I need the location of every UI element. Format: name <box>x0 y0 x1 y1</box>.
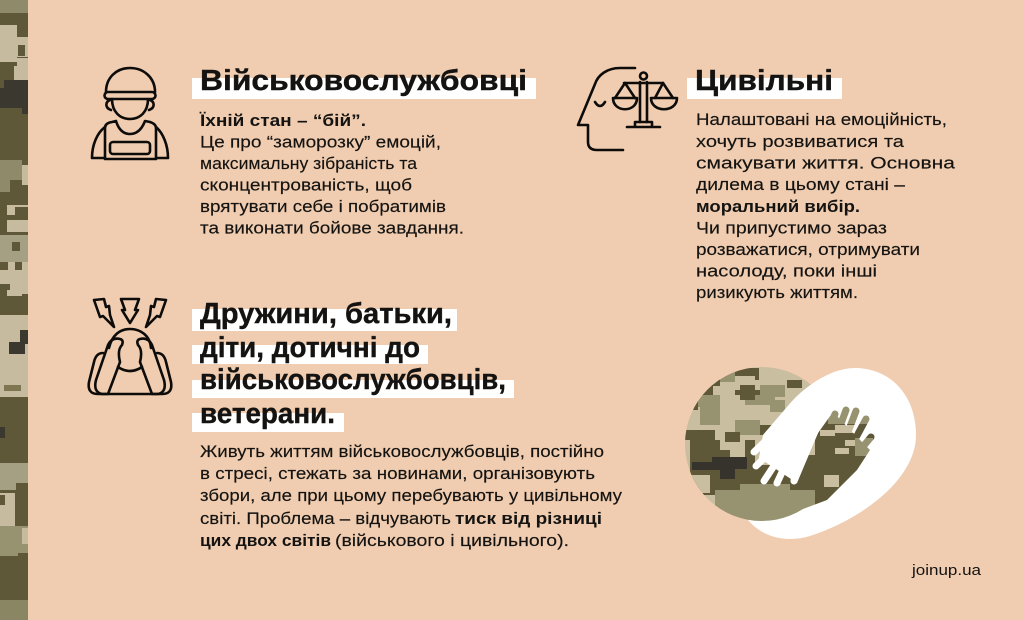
heading: family and veterans: Дружини, батьки, <box>200 298 452 330</box>
heading: military: Військовослужбовці <box>200 65 527 97</box>
text block: civilians: моральний вибір. <box>696 197 860 216</box>
text block: civilians: насолоду, поки інші <box>696 262 877 280</box>
text block: military: сконцентрованість, щоб <box>200 176 412 194</box>
text block: family and veterans: Живуть життям військовослужбовців, постійно <box>200 442 604 461</box>
text block: family and veterans: (військового і цивільного). <box>335 531 569 550</box>
text block: civilians: ризикують життям. <box>696 283 858 302</box>
text block: civilians: Чи припустимо зараз <box>696 218 887 238</box>
heading: family and veterans: ветерани. <box>200 398 335 430</box>
heading bar: military <box>192 65 536 99</box>
text block: family and veterans: цих двох світів <box>200 531 331 550</box>
text block: military: врятувати себе і побратимів <box>200 197 446 216</box>
icon: head with scales <box>578 68 677 150</box>
text block: civilians: розважатися, отримувати <box>696 240 920 259</box>
icon: soldier <box>92 68 168 159</box>
text block: military: Їхній стан – “бій”. <box>199 111 366 130</box>
icon: stressed person <box>89 299 171 394</box>
heading: family and veterans <box>192 298 514 432</box>
text block: family and veterans: збори, але при цьому перебувають у цивільному <box>200 486 623 505</box>
text block: family and veterans: світі. Проблема – відчувають <box>200 509 451 528</box>
text block: military: та виконати бойове завдання. <box>200 218 464 238</box>
illustration: hands in camouflage and white <box>680 360 920 539</box>
heading: family and veterans: військовослужбовців, <box>200 364 506 396</box>
heading: civilians: Цивільні <box>695 65 833 97</box>
text block: military <box>199 111 464 238</box>
text block: civilians: дилема в цьому стані – <box>696 175 906 194</box>
text block: military: максимальну зібраність та <box>200 154 418 173</box>
text block: military: Це про “заморозку” емоцій, <box>200 132 441 152</box>
text block: civilians: Налаштовані на емоційність, <box>696 110 947 129</box>
heading: family and veterans: діти, дотичні до <box>200 332 420 364</box>
heading bar: civilians <box>687 65 842 99</box>
text block: family and veterans <box>200 442 623 550</box>
text block: civilians <box>696 110 956 302</box>
website label: joinup.ua <box>911 562 982 579</box>
camouflage strip <box>0 0 28 620</box>
text block: family and veterans: тиск від різниці <box>455 509 602 528</box>
text block: civilians: смакувати життя. Основна <box>696 154 956 172</box>
text block: family and veterans: в стресі, стежать за новинами, організовують <box>200 464 595 483</box>
text block: civilians: хочуть розвиватися та <box>696 132 905 151</box>
